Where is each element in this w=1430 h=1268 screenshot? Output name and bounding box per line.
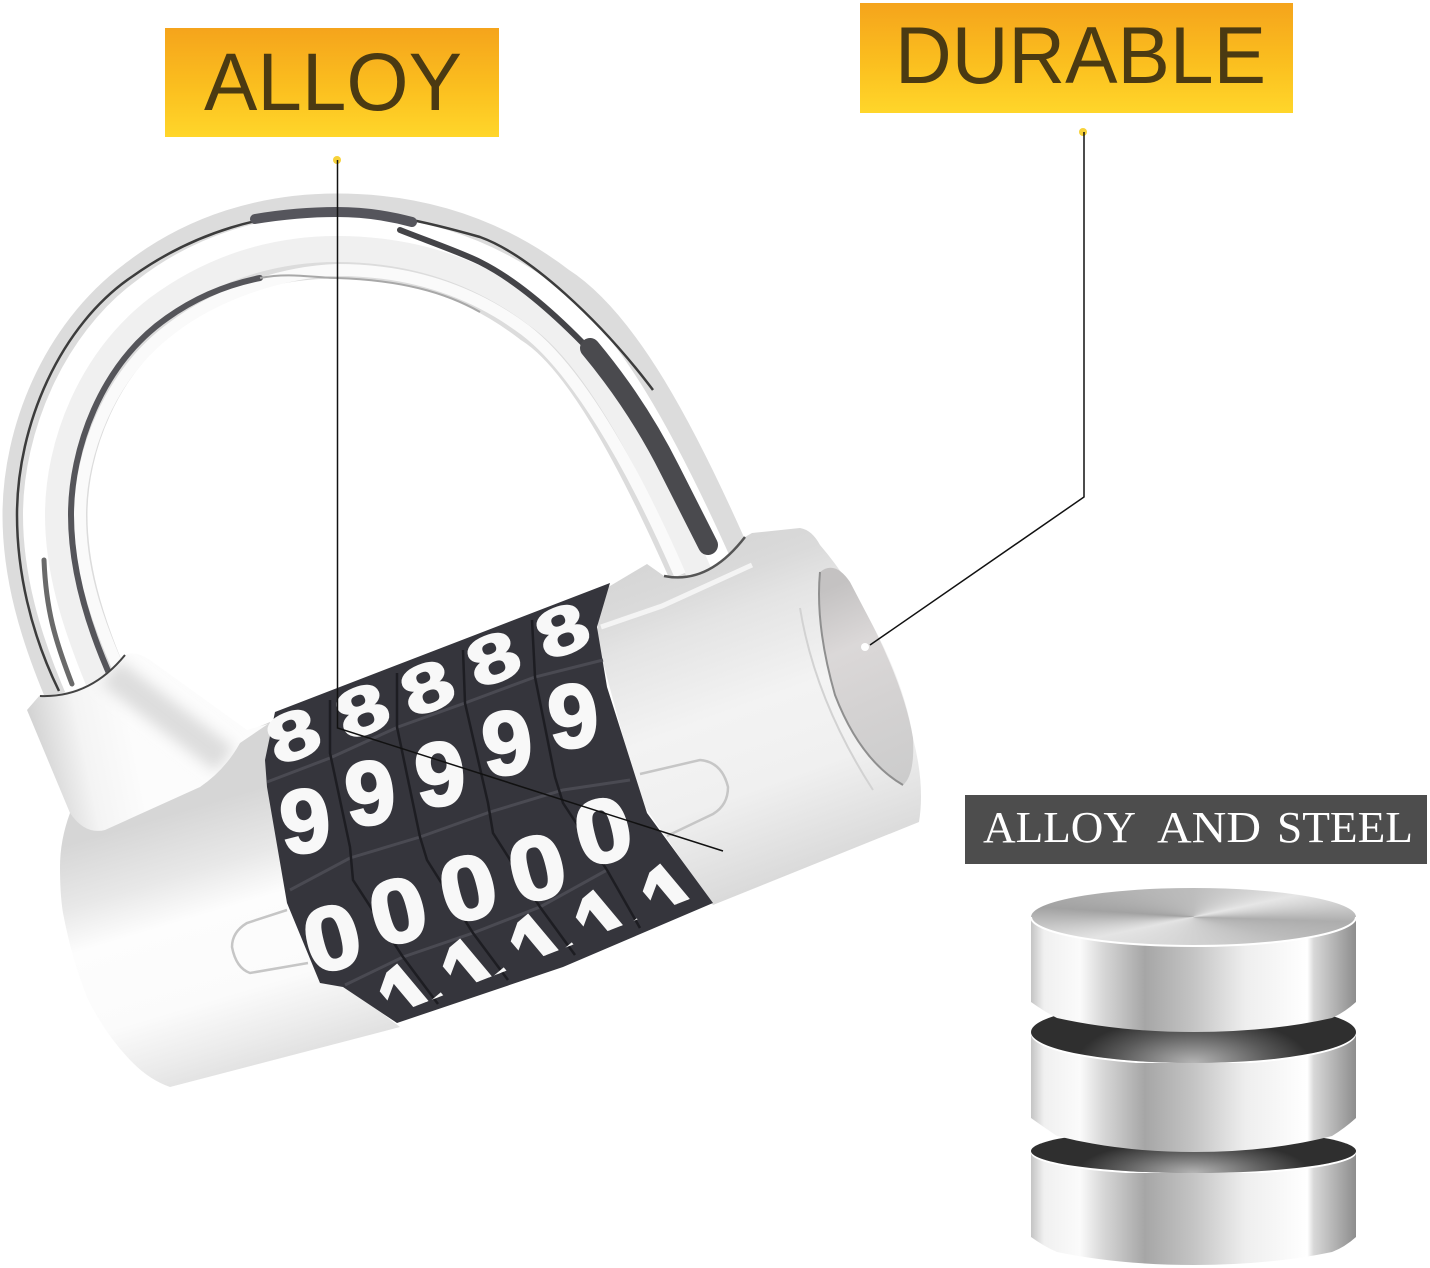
dial digits: 9 [543, 665, 603, 769]
dial digits: 0 [359, 857, 438, 967]
label: alloy and steel: AND [1157, 803, 1261, 852]
label: alloy and steel: ALLOY [983, 803, 1136, 852]
padlock [17, 212, 921, 1087]
dial digits [268, 604, 690, 1007]
dial digits: 0 [293, 884, 372, 994]
dial ridges [267, 660, 630, 985]
disc: top [1031, 888, 1356, 1032]
disc: bottom [1031, 1129, 1356, 1265]
dial digits: 8 [324, 666, 400, 755]
padlock end cap [800, 568, 913, 790]
shackle [17, 212, 721, 694]
callout: ALLOY [165, 28, 499, 137]
label: alloy and steel [965, 795, 1427, 864]
body highlight and collar ring [601, 537, 752, 627]
dial band [265, 583, 713, 1023]
callout: DURABLE: DURABLE [895, 11, 1266, 101]
dial digits: 8 [389, 643, 465, 732]
body slots [232, 760, 728, 973]
dial digits: 1 [421, 915, 523, 1022]
dial digits: 0 [429, 834, 508, 944]
dial digits: 0 [498, 814, 577, 924]
dial digits: 1 [358, 940, 460, 1047]
label: alloy and steel: STEEL [1277, 803, 1413, 852]
metal discs [1031, 888, 1356, 1265]
leader line: durable [861, 128, 1087, 651]
dial digits: 9 [340, 742, 400, 846]
padlock left shoulder [27, 653, 268, 831]
padlock left body [60, 722, 400, 1087]
disc: middle [1031, 1001, 1356, 1152]
callout: ALLOY: ALLOY [204, 37, 462, 128]
dial digits: 8 [255, 691, 331, 780]
dial digits: 8 [455, 614, 531, 703]
dial digits: 9 [477, 692, 537, 796]
leader line: alloy [333, 156, 723, 851]
dial digits: 0 [564, 777, 643, 887]
dial digits: 1 [554, 866, 656, 973]
dial digits: 9 [275, 770, 335, 874]
dial digits: 9 [410, 723, 470, 827]
dial digits: 8 [524, 586, 600, 675]
padlock right body [597, 528, 921, 905]
dial digits: 1 [489, 890, 591, 997]
dial segment dividers [330, 620, 640, 1004]
dial digits: 1 [621, 840, 723, 947]
